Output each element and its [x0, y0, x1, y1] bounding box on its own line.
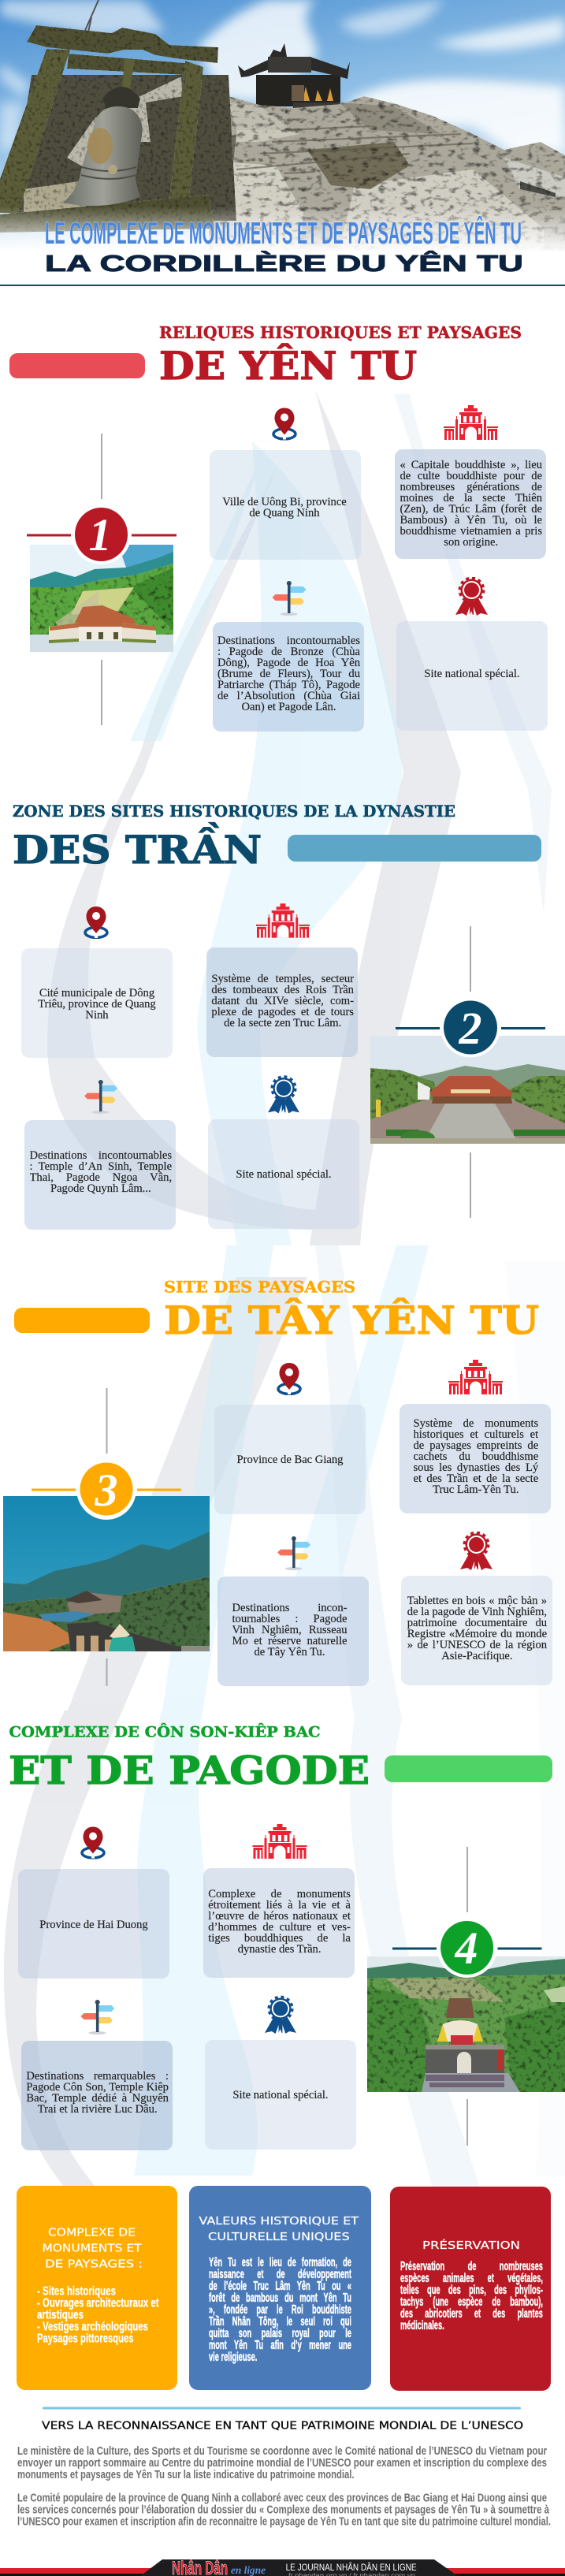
section 2: des Trần	[13, 802, 565, 1230]
heading 1: DE YÊN TU	[159, 343, 417, 389]
rock	[209, 95, 565, 252]
panel: valeurs historique et culturelle uniques: mont Yên Tu afin d’y mener une	[209, 2339, 351, 2352]
number badge 4	[437, 1918, 497, 1978]
icon: location pin	[273, 408, 296, 440]
card: description: l’œuvre de héros nationaux et	[208, 1910, 351, 1923]
card: location	[21, 948, 173, 1058]
section 1: Yên Tu	[9, 323, 548, 731]
footer title: LE JOURNAL NHÂN DÂN EN LIGNE	[286, 2561, 417, 2573]
panel: complexe de monuments et de paysages: - Sites historiques	[37, 2284, 116, 2298]
section 4: Côn Son-Kiêp Bac	[9, 1723, 565, 2150]
card: heritage: » de l’UNESCO de la région	[407, 1639, 547, 1651]
card: destinations: Dông), Pagode de Hoa Yên	[217, 657, 360, 669]
card: location: Triêu, province de Quang	[38, 998, 156, 1011]
heading 1	[159, 323, 522, 389]
card: destinations: Vinh Nghiêm, Russeau	[232, 1624, 347, 1636]
number badge 3: 3	[95, 1465, 118, 1516]
card: destinations: Thai, Pagode Ngoa Vân,	[30, 1171, 172, 1184]
panel: complexe de monuments et de paysages: MONUMENTS ET	[43, 2243, 142, 2254]
photo 1	[30, 545, 173, 652]
heading 4: ET DE PAGODE	[9, 1748, 370, 1793]
card: description: cachets du bouddhisme	[413, 1450, 538, 1463]
card: description: et des Trần et de la secte	[413, 1472, 538, 1485]
card: heritage: patrimoine documentaire du	[407, 1617, 547, 1629]
card: description: historiques et culturels et	[413, 1428, 538, 1441]
card: destinations: : Pagode de Bronze (Chùa	[217, 646, 360, 658]
heading 3: SITE DES PAYSAGES	[164, 1277, 355, 1296]
icon: temple	[256, 903, 310, 938]
card: destinations: Oan) et Pagode Lân.	[242, 701, 336, 713]
panel: valeurs historique et culturelle uniques: VALEURS HISTORIQUE ET	[199, 2216, 359, 2228]
panel: complexe de monuments et de paysages: Paysages pittoresques	[37, 2332, 134, 2345]
number badge 2: 2	[459, 1003, 482, 1054]
card: destinations: : Temple d’An Sinh, Temple	[30, 1160, 172, 1173]
panel: valeurs historique et culturelle uniques	[189, 2186, 455, 2390]
number badge 1	[71, 504, 131, 564]
card: description: d’hommes de culture et ves-	[208, 1921, 351, 1934]
icon: signpost	[80, 2000, 114, 2034]
panel: valeurs historique et culturelle uniques: naissance et de développement	[209, 2268, 351, 2281]
panel: valeurs historique et culturelle uniques: », fondée par le Roi bouddhiste	[209, 2303, 351, 2317]
panel: valeurs historique et culturelle uniques: quitta son palais royal pour le	[209, 2327, 351, 2340]
title line 2: LA CORDILLÈRE DU YÊN TU	[45, 250, 523, 277]
card: status	[205, 2040, 356, 2150]
section 3: Tây Yên Tu	[3, 1277, 552, 1686]
panel: préservation: PRÉSERVATION	[422, 2239, 520, 2252]
card: destinations	[217, 1576, 369, 1686]
panel: complexe de monuments et de paysages	[17, 2186, 177, 2390]
card: destinations: de l’Absolution (Chùa Giai	[217, 690, 360, 702]
card: description: Truc Lâm-Yên Tu.	[433, 1483, 519, 1496]
panel: préservation: telles que des pins, des phyllos-	[400, 2284, 543, 2297]
card: description	[203, 1868, 355, 1978]
photo 4	[367, 1956, 565, 2092]
heading 3: DE TÂY YÊN TU	[164, 1297, 539, 1343]
background ribbons	[4, 390, 565, 2199]
panel: valeurs historique et culturelle uniques: Trần Nhân Tông, le seul roi qui	[209, 2315, 351, 2328]
number block 2	[370, 926, 565, 1218]
card: destinations	[24, 1120, 176, 1230]
card: location	[214, 1405, 366, 1514]
UNESCO text block	[17, 2444, 551, 2529]
card: destinations: Trai et la rivière Luc Dâu.	[38, 2103, 158, 2116]
card: description: de paysages empreints de	[413, 1439, 538, 1452]
panel: préservation: médicinales.	[400, 2319, 444, 2332]
card: destinations: (Brume de Fleurs), Tour du	[217, 668, 360, 680]
card: heritage	[401, 1576, 552, 1685]
card: description: son origine.	[444, 536, 498, 549]
heading 2: DES TRẦN	[13, 822, 262, 873]
number block 4	[367, 1847, 565, 2146]
panel: complexe de monuments et de paysages: artistiques	[37, 2308, 84, 2321]
heading 2	[13, 802, 455, 873]
heading bar 3	[14, 1308, 150, 1333]
heading bar 1	[9, 353, 145, 378]
panel: complexe de monuments et de paysages: - Ouvrages architecturaux et	[37, 2296, 159, 2310]
heading 2: ZONE DES SITES HISTORIQUES DE LA DYNASTIE	[13, 802, 455, 821]
panel: préservation	[390, 2187, 565, 2391]
footer banner	[0, 2558, 565, 2576]
panel: complexe de monuments et de paysages: - Vestiges archéologiques	[37, 2320, 148, 2333]
card: location: Ninh	[85, 1009, 109, 1022]
UNESCO heading: VERS LA RECONNAISSANCE EN TANT QUE PATRIMOINE MONDIAL DE L’UNESCO	[42, 2420, 523, 2433]
heading 1: RELIQUES HISTORIQUES ET PAYSAGES	[159, 323, 522, 342]
bell frame	[0, 25, 218, 233]
heading 4	[9, 1723, 370, 1793]
number block 1	[27, 434, 177, 725]
card: location: de Quang Ninh	[249, 507, 320, 519]
card: destinations: Bac, Temple dédié à Nguyên	[26, 2092, 169, 2105]
card: location	[18, 1869, 169, 1979]
card: destinations: Pagode Quynh Lâm...	[50, 1182, 151, 1195]
icon: blue ribbon	[265, 1997, 296, 2034]
card: description	[395, 449, 546, 559]
card: description: de la secte zen Truc Lâm.	[224, 1017, 341, 1029]
heading 4: COMPLEXE DE CÔN SON-KIÊP BAC	[9, 1723, 320, 1740]
icon: location pin	[82, 1827, 104, 1859]
number badge 4: 4	[454, 1923, 478, 1974]
icon: temple	[444, 405, 498, 440]
card: status	[208, 1119, 359, 1229]
number badge 1: 1	[88, 509, 112, 560]
icon: blue ribbon	[268, 1077, 299, 1113]
frame backdrop	[8, 75, 236, 225]
card: description: Bambous) à Yên Tu, où le	[400, 514, 542, 527]
icon: signpost	[84, 1080, 117, 1114]
icon: temple	[252, 1824, 307, 1859]
card: destinations	[213, 622, 364, 731]
heading bar 4	[385, 1755, 552, 1782]
card: description: moines de la secte Thiên	[400, 492, 542, 504]
bell	[63, 87, 143, 206]
card: destinations: Mo et réserve naturelle	[232, 1635, 347, 1647]
hero photo: bell and pagoda on Yên Tu summit	[0, 0, 565, 252]
card: description	[206, 947, 358, 1057]
icon: temple	[448, 1360, 503, 1394]
card: destinations: de Tây Yên Tu.	[254, 1646, 325, 1658]
card: heritage: de la pagode de Vinh Nghiêm,	[407, 1606, 547, 1618]
panel: préservation: espèces animales et végétales,	[400, 2272, 543, 2285]
panel: complexe de monuments et de paysages: DE PAYSAGES :	[45, 2259, 143, 2270]
panel: complexe de monuments et de paysages: COMPLEXE DE	[48, 2228, 136, 2239]
card: location	[210, 450, 361, 560]
card: status	[396, 621, 548, 731]
card: description: étroitement liés à la vie et à	[208, 1899, 351, 1912]
panel: préservation: tachys (une espèce de bambou),	[400, 2295, 543, 2309]
card: description: sous les dynasties des Lý	[413, 1461, 538, 1474]
card: description: dynastie des Trần.	[238, 1943, 322, 1956]
antenna	[84, 0, 99, 31]
card: destinations: tournables : Pagode	[232, 1613, 347, 1625]
heading 3	[164, 1277, 539, 1343]
panel: valeurs historique et culturelle uniques: forêt de bambous du mont Yên Tu	[209, 2291, 351, 2305]
icon: red ribbon	[455, 578, 488, 616]
card: heritage: Asie-Pacifique.	[441, 1650, 513, 1662]
card: destinations: Patriarche (Tháp Tô), Pagode	[217, 679, 360, 691]
photo 2	[370, 1036, 565, 1146]
panel: valeurs historique et culturelle uniques: CULTURELLE UNIQUES	[208, 2232, 350, 2243]
number badge 3	[76, 1458, 136, 1520]
pagoda	[238, 43, 350, 109]
rock steps	[236, 126, 473, 173]
card: description: plexe de pagodes et de tours	[211, 1006, 354, 1018]
photo 3	[3, 1496, 210, 1651]
card: description	[400, 1404, 551, 1513]
icon: signpost	[273, 581, 306, 616]
title	[45, 216, 523, 277]
number block 3	[3, 1388, 210, 1686]
icon: signpost	[277, 1536, 310, 1570]
panel: valeurs historique et culturelle uniques: de l’école Truc Lâm Yên Tu ou «	[209, 2280, 351, 2293]
number badge 2	[440, 998, 500, 1058]
card: destinations	[21, 2041, 173, 2150]
icon: red ribbon	[460, 1532, 493, 1570]
card: description: datant du XIVe siècle, com-	[211, 995, 354, 1007]
panel: préservation: des abricotiers et des plantes	[400, 2307, 543, 2321]
card: description: bouddhisme vietnamien a pris	[400, 525, 542, 538]
card: heritage: Registre «Mémoire du monde	[407, 1628, 547, 1640]
card: description: de culte bouddhiste pour de	[400, 470, 542, 482]
card: description: nombreuses générations de	[400, 481, 542, 493]
heading bar 2	[288, 835, 541, 862]
card: destinations: Pagode Côn Son, Temple Kiêp	[26, 2081, 169, 2094]
clouds	[0, 0, 565, 158]
card: description: des tombeaux des Rois Trần	[211, 984, 354, 996]
card: description: (Zen), de Trúc Lâm (forêt de	[400, 503, 542, 516]
card: description: tiges bouddhiques de la	[208, 1932, 351, 1945]
icon: location pin	[278, 1363, 300, 1394]
panel: valeurs historique et culturelle uniques: vie religieuse.	[209, 2351, 257, 2364]
icon: location pin	[85, 906, 107, 938]
UNESCO text block: monuments et paysages de Yên Tu sur la liste indicative du patrimoine mondial.	[17, 2468, 355, 2481]
